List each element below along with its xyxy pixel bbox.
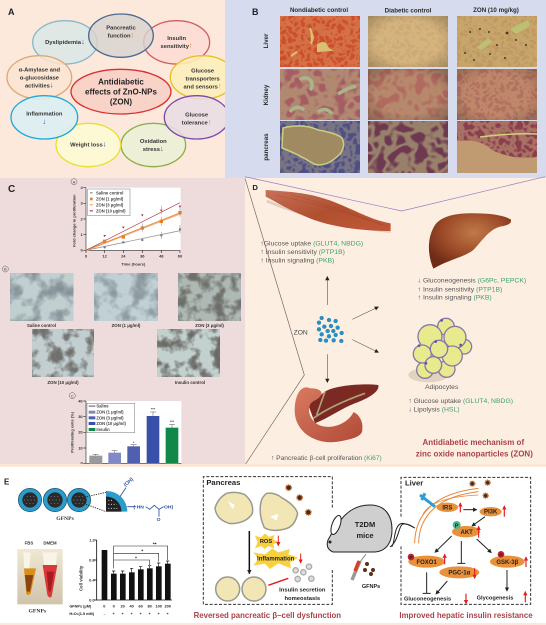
bubble: glucose transporters and sensors: transporters	[185, 76, 220, 82]
micrograph: ZON 1	[94, 273, 158, 328]
text: insulin secretion homeostasis: Insulin secretion	[279, 587, 326, 593]
text: pancreas effect: ↑ Pancreatic β-cell proliferation (Ki67)	[271, 455, 382, 462]
pancreas dashed box	[203, 477, 332, 604]
syringe	[352, 554, 366, 580]
line chart: fold change in proliferation: ZON (1 μg/ml)	[96, 196, 124, 201]
line chart: fold change in proliferation: Time (hours)	[121, 262, 146, 267]
panel B: histology	[225, 0, 546, 178]
line chart: fold change in proliferation	[71, 179, 183, 267]
micrograph: kidney nondiabetic	[280, 69, 360, 120]
bubble: glucose transporters and sensors	[170, 56, 235, 99]
text: adipocytes: ↓ Lipolysis (HSL)	[408, 407, 460, 414]
bar chart: cell viability: 0	[113, 605, 115, 609]
column headings: ZON (10 mg/kg)	[473, 7, 519, 14]
polymer chain structure	[120, 476, 173, 523]
label: GFNPs: GFNPs	[362, 584, 380, 590]
phospho markers	[408, 521, 504, 560]
bar chart: proliferating cells: ZON (1 μg/ml)	[96, 410, 124, 415]
icon: nanoparticles	[317, 316, 344, 343]
line chart: fold change in proliferation: A	[73, 179, 76, 184]
column headings	[290, 7, 519, 14]
islets	[215, 492, 298, 601]
text: liver effects: ↑ Insulin signaling (PKB)	[418, 295, 492, 302]
line chart: fold change in proliferation: Fold change in proliferation	[71, 194, 76, 247]
bar chart: cell viability: Cell viability	[78, 565, 83, 591]
bubble: pancreatic function: Pancreatic	[106, 25, 136, 31]
polymer chain structure: OH)	[164, 504, 173, 510]
micrograph: ZON 10: ZON (10 μg/ml)	[47, 380, 79, 385]
text: adipocytes	[408, 384, 513, 414]
micrograph: kidney diabetic	[368, 69, 448, 120]
bar chart: cell viability: 200	[164, 605, 171, 609]
bar chart: cell viability: +	[131, 612, 134, 616]
bubble: insulin sensitivity: Insulin	[167, 36, 186, 42]
panel letter E: E	[4, 477, 10, 486]
micrograph: saline control: Saline control	[27, 323, 56, 328]
line chart: fold change in proliferation: 24	[121, 253, 126, 258]
line chart: fold change in proliferation: 2	[80, 216, 83, 221]
bar chart: cell viability: 100	[155, 605, 162, 609]
bar chart: proliferating cells: 40	[78, 398, 83, 403]
micrograph: pancreas diabetic	[368, 121, 448, 173]
bubble: glucose tolerance: tolerance↑	[182, 117, 212, 126]
line chart: fold change in proliferation: 36	[140, 253, 145, 258]
centre bubble title: effects of ZnO-NPs	[85, 88, 157, 97]
tube photo: FBS	[25, 540, 33, 545]
bubble: weight loss: Weight loss↓	[70, 139, 107, 148]
bar chart: cell viability: 40	[130, 605, 134, 609]
caption: liver: Improved hepatic insulin resistance	[399, 611, 533, 620]
tube photo: GFNPs	[29, 608, 47, 614]
text: muscle effects	[260, 240, 363, 265]
column headings: Diabetic control	[385, 8, 432, 14]
polymer chain structure: HN	[137, 504, 144, 510]
micrograph: liver nondiabetic	[280, 16, 360, 67]
line chart: fold change in proliferation: 1	[80, 232, 83, 237]
bar chart: proliferating cells: ZON (3 μg/ml)	[96, 415, 124, 420]
text: liver effects	[418, 278, 526, 302]
bubble: glucose transporters and sensors: Glucose	[191, 68, 215, 74]
effects ring diagram	[7, 14, 235, 167]
caption: pancreatic: Reversed pancreatic β–cell dysfunction	[194, 611, 341, 620]
burst: ROS	[255, 533, 278, 549]
bar chart: cell viability: -	[104, 612, 106, 616]
phospho markers: P	[455, 523, 459, 529]
bar chart: cell viability: 0.4	[89, 578, 95, 583]
nanoparticles	[286, 485, 311, 515]
line chart: fold change in proliferation: 12	[102, 253, 108, 258]
mechanism title: Antidiabetic mechanism of	[423, 438, 524, 447]
panel letter C: C	[8, 184, 15, 195]
micrograph: liver diabetic	[368, 16, 448, 67]
bubble: inflammation: ↓	[42, 117, 46, 126]
bar chart: proliferating cells: C	[71, 393, 74, 398]
micrograph: pancreas nondiabetic	[280, 121, 360, 173]
outcome labels: Glycogenesis	[477, 595, 513, 601]
tube photo	[17, 540, 63, 614]
line chart: fold change in proliferation: 48	[159, 253, 164, 258]
polymer chain structure: (OH)	[123, 476, 135, 488]
line chart: fold change in proliferation: ZON (3 μg/ml)	[96, 202, 124, 207]
bar chart: cell viability	[69, 538, 172, 616]
bubble: oxidation stress: stress↓	[143, 144, 164, 153]
bubble: glucose tolerance	[164, 96, 229, 139]
panel D: antidiabetic mechanism	[245, 177, 546, 467]
bar chart: proliferating cells: Proliferating cells (%)	[69, 411, 74, 453]
bar chart: cell viability: +	[167, 612, 170, 616]
liver dashed box	[401, 477, 531, 604]
tail stub	[392, 523, 413, 547]
receptor	[420, 493, 435, 507]
panel C: cell proliferation	[0, 178, 245, 467]
node labels: GSK-3β	[496, 560, 519, 566]
red inhibitor line	[268, 578, 288, 585]
bar chart: proliferating cells: *	[133, 441, 135, 445]
polymer chain structure: (	[133, 504, 135, 510]
bubble: pancreatic function: function↑	[108, 30, 134, 39]
row headings	[263, 33, 270, 161]
bar chart: cell viability: 0	[103, 605, 105, 609]
bar chart: cell viability: +	[149, 612, 152, 616]
micrograph: insulin control	[157, 329, 220, 385]
bubble: amylase and glucosidase: α-glucosidase	[20, 76, 60, 82]
bar chart: cell viability: *	[141, 549, 143, 555]
heading: liver: Liver	[405, 479, 423, 488]
icon: adipocytes	[408, 318, 472, 382]
icon: muscle	[266, 190, 391, 232]
text: liver effects: ↓ Gluconeogenesis (G6Pc, PEPCK)	[418, 278, 526, 285]
text: insulin secretion homeostasis	[279, 587, 326, 602]
row headings: pancreas	[263, 133, 270, 161]
bar chart: proliferating cells: 20	[78, 430, 83, 435]
centre bubble title	[71, 69, 171, 114]
bar chart: cell viability: 0.8	[89, 558, 95, 563]
centre bubble title: (ZON)	[110, 98, 132, 107]
panel letter B: B	[252, 7, 259, 17]
centre bubble title: Antidiabetic	[98, 78, 144, 87]
panel frame lines	[245, 177, 545, 465]
bubble: insulin sensitivity: sensitivity↑	[160, 41, 193, 50]
bar chart: cell viability: 1.2	[89, 538, 95, 543]
burst: inflammation: Inflammation	[257, 556, 295, 562]
micrograph: ZON 3	[178, 273, 241, 328]
bubble: amylase and glucosidase	[7, 56, 72, 99]
bar chart: cell viability: 20	[121, 605, 125, 609]
panel E: GFNPs	[0, 464, 546, 625]
text: insulin secretion homeostasis: homeostasis	[285, 596, 320, 602]
bar chart: proliferating cells: Insulin	[96, 427, 110, 432]
bar chart: cell viability: +	[113, 612, 116, 616]
node labels: PGC-1α	[448, 571, 471, 577]
bar chart: proliferating cells: ZON (10 μg/ml)	[96, 421, 127, 426]
micrographs section marker	[2, 266, 8, 272]
arrows from ZON	[327, 277, 378, 382]
bubble: dyslipidemia: Dyslipidemia↓	[45, 37, 85, 46]
icon: liver	[429, 213, 511, 269]
outcome labels: Gluconeogenesis	[404, 597, 451, 603]
node labels: IRS	[442, 505, 452, 511]
panel letter A: A	[8, 7, 15, 17]
bar chart: cell viability: GFNPs (μM)	[69, 605, 92, 609]
bar chart: cell viability: +	[140, 612, 143, 616]
GFNP particles	[18, 488, 127, 522]
text: muscle effects: ↑Glucose uptake (GLUT4, NBDG)	[260, 240, 363, 247]
node labels: AKT	[461, 530, 473, 536]
line chart: fold change in proliferation: 0	[85, 253, 88, 258]
icon: pancreas	[295, 384, 378, 442]
bubble: insulin sensitivity	[144, 21, 210, 64]
bar chart: cell viability: **	[153, 542, 157, 548]
bar chart: cell viability: 80	[148, 605, 152, 609]
bar chart: proliferating cells	[69, 393, 181, 466]
bar chart: cell viability: +	[122, 612, 125, 616]
bubble: oxidation stress: Oxidation	[140, 139, 167, 145]
heading: pancreas: Pancreas	[206, 478, 240, 487]
node labels: FOXO1	[417, 560, 437, 566]
micrograph: ZON 3: ZON (3 μg/ml)	[195, 323, 224, 328]
bar chart: proliferating cells: Saline	[96, 404, 109, 409]
panel A: antidiabetic effects	[0, 0, 235, 178]
cell membrane	[415, 488, 478, 543]
phospho markers: P	[499, 552, 503, 557]
bubble: amylase and glucosidase: α-Amylase and	[19, 68, 61, 74]
label: ZON: ZON	[294, 329, 308, 336]
burst: inflammation	[253, 548, 298, 569]
line chart: fold change in proliferation: 3	[80, 201, 83, 206]
column headings: Nondiabetic control	[290, 7, 348, 14]
row headings: Liver	[263, 33, 270, 48]
mechanism title: zinc oxide nanoparticles (ZON)	[416, 450, 533, 459]
mouse illustration: mice	[356, 531, 374, 540]
mechanism title	[416, 438, 533, 459]
bubble: weight loss	[56, 123, 121, 167]
micrograph: saline control	[10, 273, 74, 328]
bubble: pancreatic function	[89, 14, 153, 57]
micrograph: liver ZON	[457, 16, 537, 67]
dosed nanoparticles	[363, 562, 375, 576]
down arrow	[247, 531, 252, 574]
node labels	[417, 505, 519, 577]
bar chart: proliferating cells: 10	[78, 445, 83, 450]
tube photo: DMEM	[43, 540, 57, 545]
micrograph: ZON 10	[32, 329, 94, 385]
bubble: oxidation stress	[121, 123, 186, 167]
burst: ROS: ROS	[260, 539, 272, 545]
micrograph: pancreas ZON	[457, 121, 537, 173]
text: liver effects: ↑ Insulin sensitivity (PTP1B)	[418, 286, 502, 293]
red regulation arrows	[445, 503, 526, 604]
mouse illustration: T2DM	[355, 520, 375, 529]
phospho markers: P	[409, 555, 413, 560]
text: adipocytes: ↑ Glucose uptake (GLUT4, NBDG)	[408, 398, 513, 405]
bubble: amylase and glucosidase: activities↓	[25, 81, 54, 90]
bar chart: proliferating cells: 0	[80, 461, 83, 466]
mouse illustration	[327, 505, 415, 590]
line chart: fold change in proliferation: Saline control	[96, 190, 123, 195]
line chart: fold change in proliferation: ZON (10 μg/ml)	[96, 208, 126, 213]
insulin granules	[293, 564, 314, 582]
line chart: fold change in proliferation: 4	[80, 185, 83, 190]
line chart: fold change in proliferation: 0	[80, 248, 83, 253]
bar chart: cell viability: H₂O₂(1.5 mM)	[69, 612, 95, 616]
micrograph: ZON 1: ZON (1 μg/ml)	[112, 323, 141, 328]
GFNP particles: GFNPs	[56, 516, 75, 522]
micrographs section marker: B	[4, 267, 7, 272]
line chart: fold change in proliferation: 60	[178, 253, 183, 258]
text: muscle effects: ↑ Insulin signaling (PKB)	[260, 258, 334, 265]
outcome labels	[404, 595, 513, 603]
row headings: Kidney	[263, 84, 270, 105]
micrograph: insulin control: Insulin control	[175, 380, 205, 385]
bubble: inflammation: Inflammation	[26, 111, 63, 117]
signalling nodes	[408, 503, 525, 578]
polymer chain structure: O	[157, 517, 161, 523]
micrograph: kidney ZON	[457, 69, 537, 120]
bar chart: cell viability: 0.0	[89, 598, 95, 603]
bubble: dyslipidemia	[33, 21, 97, 64]
black pathway arrows	[423, 510, 507, 594]
text: adipocytes: Adipocytes	[425, 384, 459, 391]
nanoparticles	[470, 480, 490, 498]
bar chart: cell viability: *	[135, 555, 137, 561]
bar chart: cell viability: +	[158, 612, 161, 616]
bubble: glucose transporters and sensors: and sensors↑	[184, 81, 222, 90]
bar chart: proliferating cells: 30	[78, 414, 83, 419]
bubble: inflammation	[11, 96, 78, 139]
bar chart: proliferating cells: ***	[151, 408, 156, 412]
bar chart: cell viability: 60	[139, 605, 143, 609]
node labels: PI3K	[484, 510, 498, 516]
red down arrows	[278, 536, 301, 563]
text: muscle effects: ↑ Insulin sensitivity (PTP1B)	[260, 249, 345, 256]
panel letter D: D	[252, 183, 258, 192]
bubble: glucose tolerance: Glucose	[185, 112, 209, 118]
bar chart: proliferating cells: ***	[170, 420, 175, 424]
